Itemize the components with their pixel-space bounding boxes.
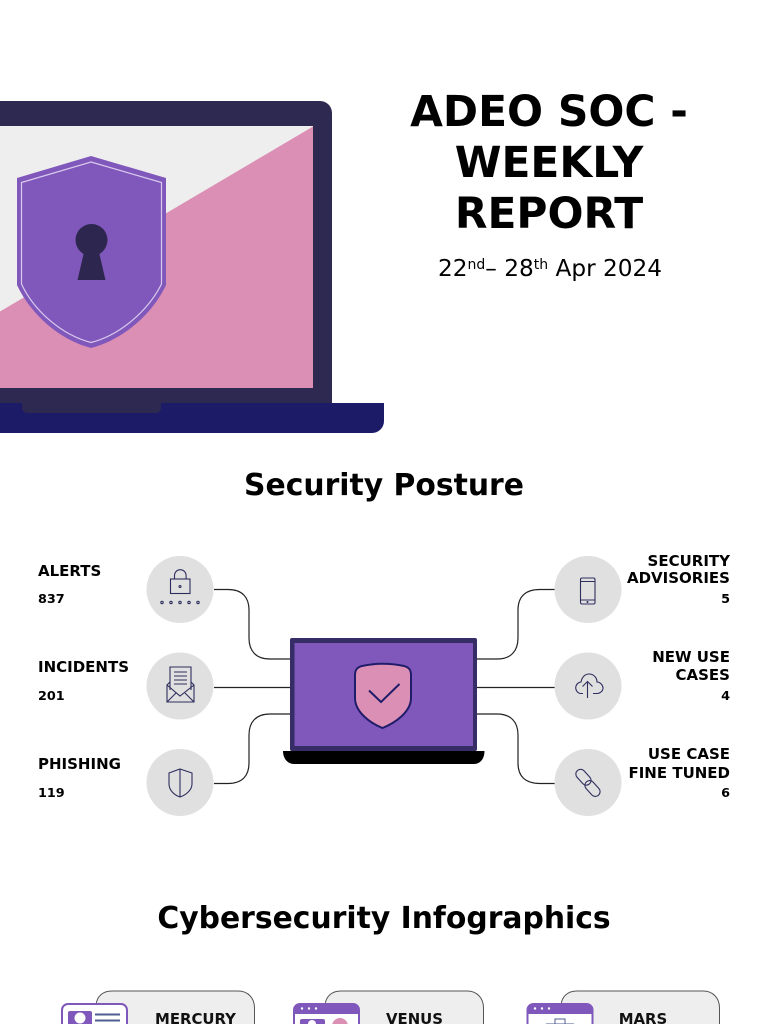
date range: 22 — [438, 255, 468, 282]
item: use case fine tuned: FINE TUNED — [628, 764, 730, 782]
icon: browser window with briefcase — [528, 1004, 592, 1024]
date range: – 28 — [485, 255, 534, 282]
date range: Apr 2024 — [548, 255, 662, 282]
item: security advisories — [554, 552, 731, 623]
item: new use cases: NEW USE — [652, 648, 730, 666]
item: incidents: INCIDENTS — [38, 658, 129, 676]
item: alerts: 837 — [38, 592, 65, 607]
hero laptop illustration — [0, 101, 384, 433]
item: alerts — [38, 556, 214, 623]
card: mars — [528, 991, 720, 1024]
title — [410, 87, 688, 238]
item: use case fine tuned: USE CASE — [648, 745, 730, 763]
card: venus — [294, 991, 484, 1024]
item: incidents — [38, 652, 214, 720]
item: security advisories: SECURITY — [648, 552, 731, 570]
icon: envelope with letter — [167, 667, 194, 702]
card: mercury — [62, 991, 254, 1024]
icon: padlock — [161, 570, 199, 604]
item: alerts: ALERTS — [38, 562, 101, 580]
icon: pink check shield — [355, 664, 411, 728]
item: new use cases — [554, 648, 730, 720]
title: REPORT — [455, 189, 643, 238]
item: use case fine tuned: 6 — [721, 786, 730, 801]
item: security advisories: 5 — [721, 592, 730, 607]
title: WEEKLY — [455, 138, 645, 187]
heading: cybersecurity infographics: Cybersecurity Infographics — [157, 901, 611, 936]
central laptop with shield — [283, 638, 484, 764]
item: new use cases: 4 — [721, 689, 730, 704]
item: incidents: 201 — [38, 689, 65, 704]
item: phishing: 119 — [38, 786, 65, 801]
connector lines — [214, 590, 555, 784]
icon: shield with keyhole — [17, 156, 166, 348]
icon: chain link — [574, 767, 602, 798]
item: phishing: PHISHING — [38, 755, 121, 773]
item: security advisories: ADVISORIES — [627, 569, 730, 587]
item: use case fine tuned — [554, 745, 730, 816]
date range: th — [534, 257, 548, 273]
icon: outline shield — [169, 769, 192, 797]
heading: security posture: Security Posture — [244, 468, 524, 503]
icon: smartphone — [580, 578, 595, 604]
item: phishing — [38, 749, 214, 816]
date range: nd — [468, 257, 485, 273]
title: ADEO SOC - — [410, 87, 688, 136]
icon: id card — [62, 1004, 127, 1024]
icon: cloud upload — [576, 674, 603, 698]
item: new use cases: CASES — [676, 666, 730, 684]
icon: browser window with gear — [294, 1004, 359, 1024]
